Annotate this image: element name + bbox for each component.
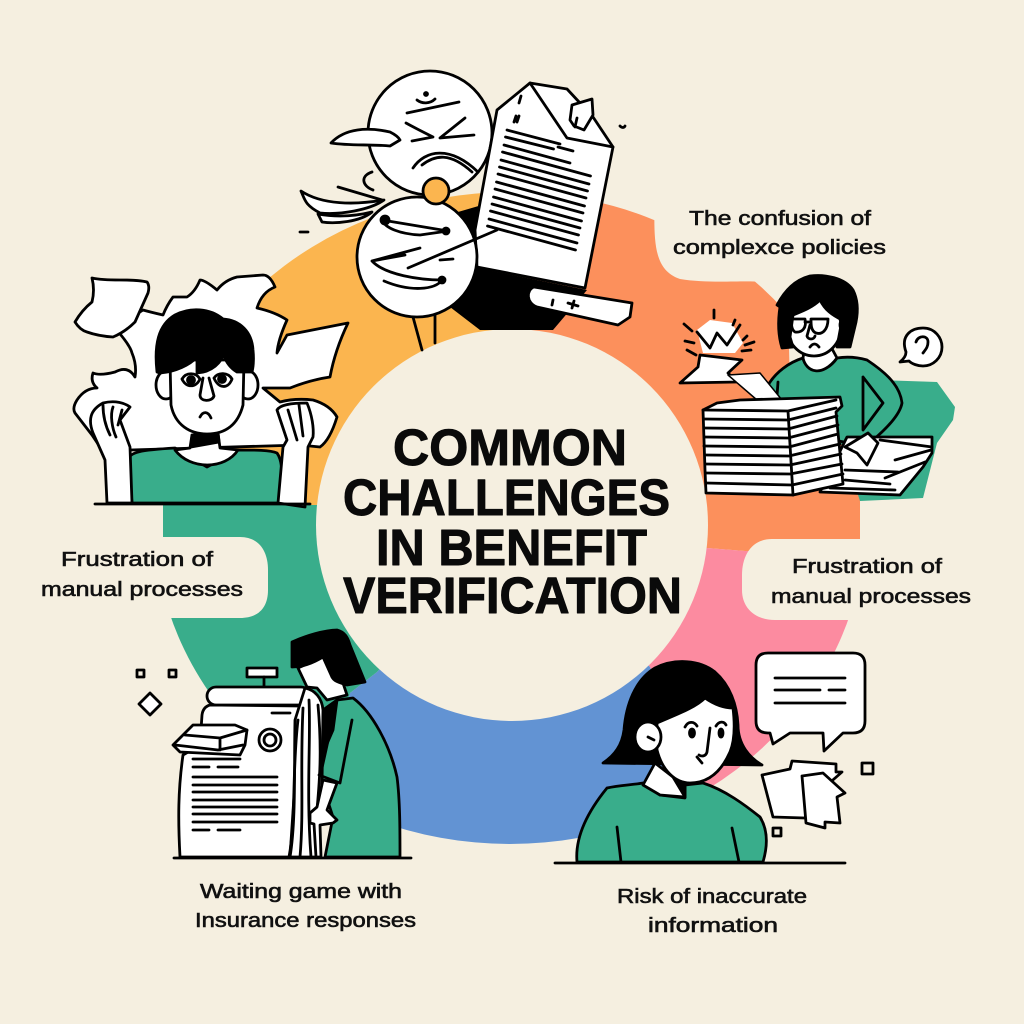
hair <box>603 662 762 765</box>
label: manual processes right: Frustration of <box>792 556 943 578</box>
face <box>787 298 841 356</box>
icon: orange knob <box>423 178 449 204</box>
facial features <box>182 374 232 418</box>
shirt <box>577 783 766 862</box>
glasses and mouth <box>792 319 828 347</box>
hand and arm <box>310 780 337 857</box>
icon: angry face <box>368 71 492 195</box>
loose sheet <box>728 373 782 400</box>
label: manual processes left <box>41 549 243 601</box>
icon: papers <box>762 761 845 828</box>
label: complex policies <box>673 208 886 259</box>
icon: pointed nose <box>331 129 400 146</box>
illustration: top angry faces and document <box>300 71 632 350</box>
neck <box>643 763 685 797</box>
title: VERIFICATION <box>343 567 682 624</box>
illustration: person at machine with long paper <box>137 630 411 858</box>
long paper drape <box>290 688 323 857</box>
label: inaccurate information: Risk of inaccurate <box>617 886 807 908</box>
ear <box>635 722 661 752</box>
ring segment: blue <box>348 666 663 844</box>
machine sign <box>247 668 277 687</box>
baseline <box>95 503 310 505</box>
illustration: woman with stack of papers <box>680 276 955 501</box>
title <box>343 419 682 624</box>
hair <box>777 276 857 348</box>
roller <box>207 687 310 705</box>
centre circle <box>316 329 708 721</box>
icon: scribbled face <box>357 197 497 350</box>
ring segment: pink <box>648 548 848 786</box>
seal <box>259 729 281 751</box>
illustration: stressed person with flying papers <box>74 275 348 507</box>
hair <box>156 310 253 373</box>
icon: document <box>475 83 625 288</box>
label: manual processes right <box>771 556 971 608</box>
label: complex policies: complexce policies <box>673 237 886 259</box>
neck <box>803 345 837 371</box>
icon: small squares <box>773 763 873 836</box>
label: manual processes left: manual processes <box>41 579 243 601</box>
label: complex policies: The confusion of <box>689 208 872 230</box>
icon: label pill <box>528 287 632 325</box>
icon: question bubble <box>900 328 942 366</box>
label: waiting game <box>195 881 416 932</box>
facial features <box>648 722 726 763</box>
title: COMMON <box>393 419 627 476</box>
ring segment: yellow <box>234 193 526 505</box>
label: manual processes right: manual processes <box>771 586 971 608</box>
icon: paper cloud <box>74 275 348 450</box>
title: CHALLENGES <box>343 469 670 526</box>
ring segment: orange <box>528 203 860 551</box>
coat <box>320 698 400 857</box>
baseline <box>174 857 411 859</box>
face <box>657 698 734 783</box>
label: inaccurate information <box>617 886 807 937</box>
label: inaccurate information: information <box>648 915 778 937</box>
icon: loose paper <box>75 278 149 337</box>
face <box>298 657 347 700</box>
right paper pile <box>820 433 932 495</box>
icon: small squares and diamond <box>137 670 176 715</box>
small papers <box>173 725 247 755</box>
title: IN BENEFIT <box>376 519 647 576</box>
paper stack <box>703 397 843 495</box>
icon: wing lines <box>300 172 384 232</box>
illustration: woman with speech bubble <box>555 653 873 863</box>
document body <box>179 705 300 857</box>
baseline <box>555 862 845 864</box>
shirt <box>767 357 902 445</box>
icon: speech bubble <box>756 653 865 751</box>
label: manual processes left: Frustration of <box>61 549 214 571</box>
face <box>170 360 244 434</box>
icon: burst bulb <box>680 310 754 383</box>
ears <box>156 371 176 399</box>
shirt <box>128 448 283 503</box>
hand right <box>277 403 313 507</box>
neck <box>175 433 238 465</box>
green backdrop <box>840 380 955 501</box>
ring: five coloured segments <box>163 193 860 844</box>
label: waiting game: Waiting game with <box>200 881 402 903</box>
hand left <box>90 402 132 503</box>
label: waiting game: Insurance responses <box>195 910 416 932</box>
hair <box>292 630 365 685</box>
text lines <box>193 713 290 830</box>
ring segment: green <box>163 505 380 754</box>
